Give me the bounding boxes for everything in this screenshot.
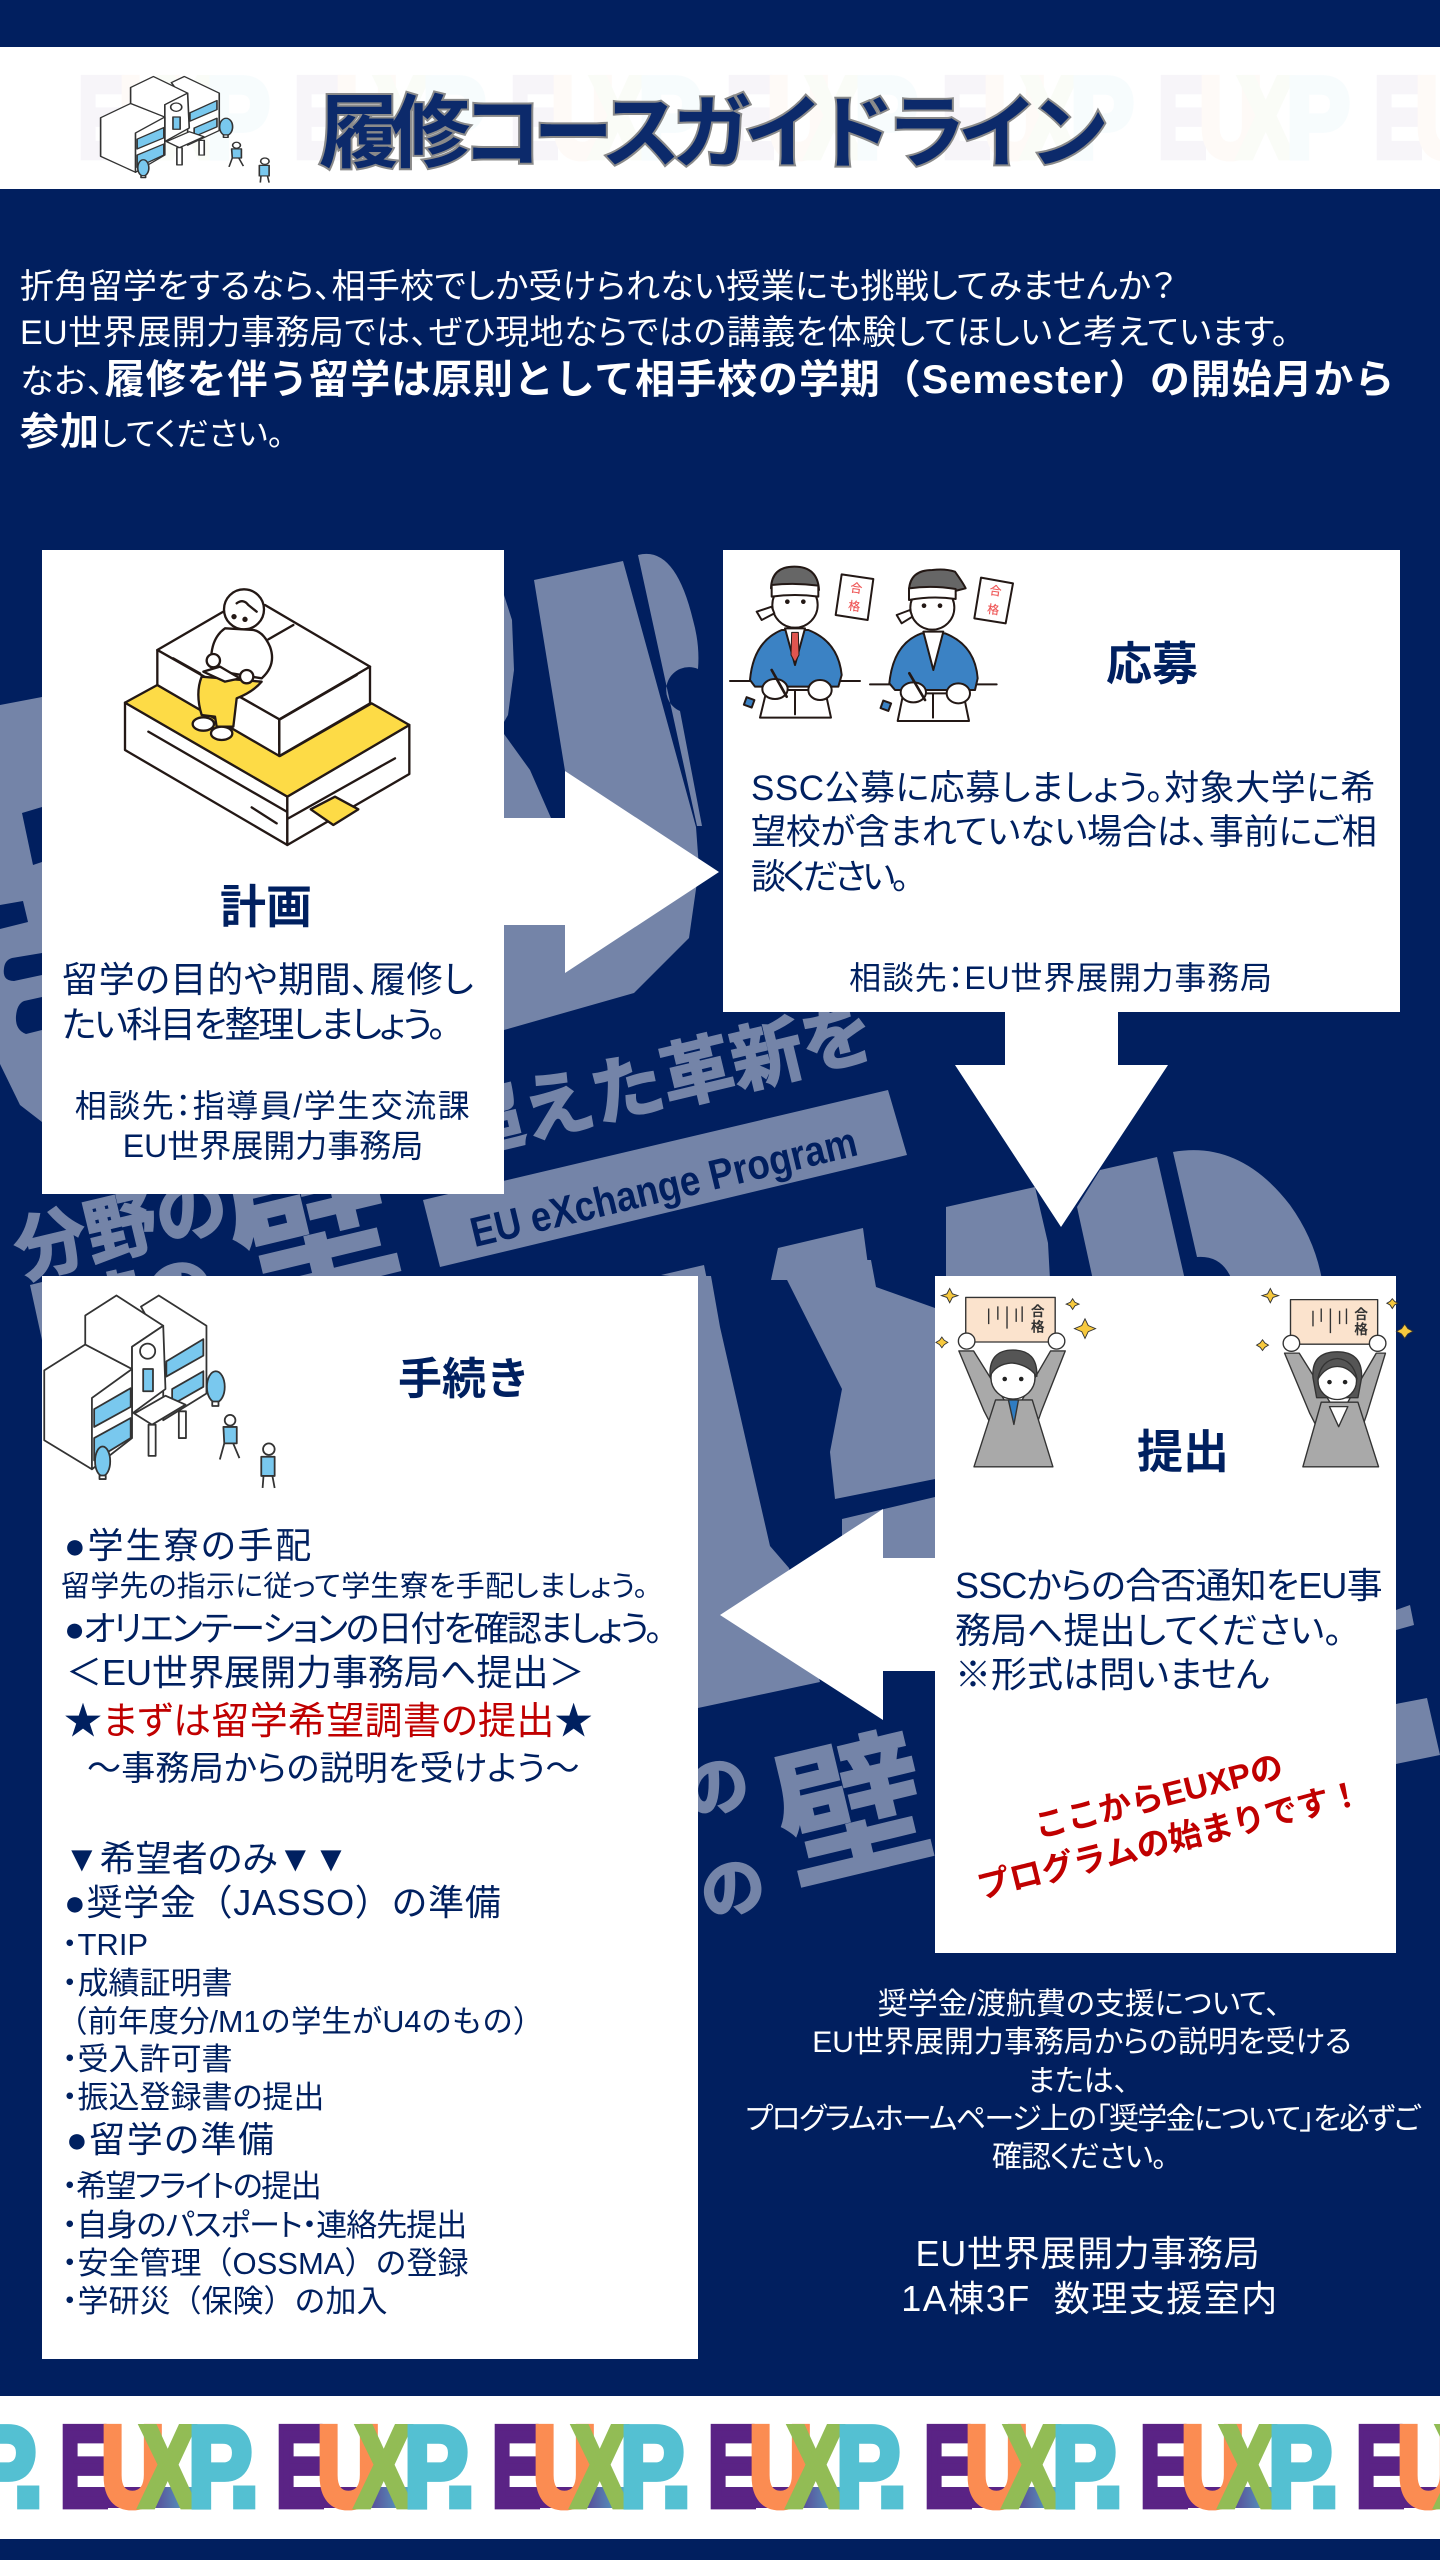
logo strip: X — [1004, 2404, 1059, 2531]
logo strip: P — [1052, 2404, 1116, 2531]
logo strip: X — [1220, 2404, 1275, 2531]
faint logo pattern: P — [1070, 55, 1134, 182]
heading: procedures: 手続き — [398, 1355, 530, 1404]
logo strip: . — [1309, 2403, 1340, 2530]
intro text: EU世界展開力事務局では、ぜひ現地ならではの講義を体験してほしいと考えています。 — [20, 314, 1289, 352]
faint logo pattern: U — [119, 54, 183, 182]
callout: program starts here: プログラムの始まりです！ — [973, 1774, 1366, 1906]
logo strip: E — [708, 2404, 757, 2531]
panel: procedures — [42, 1276, 698, 2359]
text: scholarship and preparation list: ・受入許可書 — [62, 2042, 232, 2077]
text: plan body — [62, 959, 474, 1045]
text: housing and orientation list: ●オリエンテーションの日付を確認ましょう。 — [64, 1610, 661, 1649]
text: scholarship note: または、 — [1027, 2065, 1129, 2098]
faint logo pattern: X — [158, 55, 213, 182]
logo strip: P — [1268, 2404, 1332, 2531]
text: scholarship note: 奨学金/渡航費の支援について、 — [878, 1988, 1280, 2021]
text: submit body: ※形式は問いません — [955, 1654, 1269, 1695]
logo strip: E — [276, 2404, 325, 2531]
text: housing and orientation list: ＜EU世界展開力事務局へ提出＞ — [66, 1652, 585, 1693]
logo strip: U — [1181, 2403, 1245, 2531]
text: scholarship and preparation list: ●奨学金（JASSO）の準備 — [64, 1882, 502, 1923]
text: scholarship and preparation list: ▼希望者のみ▼▼ — [64, 1838, 349, 1879]
text: scholarship note — [745, 1988, 1422, 2174]
icon: graduates holding certificates — [935, 1288, 1414, 1468]
arrow: apply to submit — [955, 1012, 1168, 1227]
arrow: submit to procedures — [720, 1509, 935, 1720]
intro text: なお、履修を伴う留学は原則として相手校の学期（Semester）の開始月から — [20, 358, 1395, 402]
text: scholarship and preparation list: ・成績証明書 — [62, 1966, 232, 2001]
logo strip: . — [1093, 2403, 1124, 2530]
text: office location: EU世界展開力事務局 — [915, 2233, 1260, 2274]
logo strip: E — [1140, 2404, 1189, 2531]
background watermark: の — [693, 1846, 773, 1932]
logo strip: E — [924, 2404, 973, 2531]
logo strip: P — [836, 2404, 900, 2531]
header band — [0, 47, 1440, 189]
logo strip: P — [404, 2404, 468, 2531]
text: plan contact: EU世界展開力事務局 — [123, 1128, 423, 1164]
faint logo pattern: E — [942, 55, 991, 182]
background watermark: 分野の — [7, 1165, 236, 1293]
logo strip: E — [60, 2404, 109, 2531]
background watermark: EU eXchange Program — [466, 1118, 862, 1256]
text: apply body: 談ください。 — [751, 858, 906, 897]
background watermark: 壁 — [760, 1712, 945, 1911]
faint logo pattern: X — [1022, 55, 1077, 182]
logo strip: X — [140, 2404, 195, 2531]
text: scholarship and preparation list — [57, 1838, 543, 2319]
background watermark: 壁 — [210, 1114, 413, 1331]
text: submit body — [955, 1565, 1382, 1695]
heading: apply: 応募 — [1106, 638, 1198, 690]
logo strip: X — [788, 2404, 843, 2531]
faint logo pattern: P — [206, 55, 270, 182]
faint logo pattern: P — [854, 55, 918, 182]
faint logo pattern: E — [1374, 55, 1423, 182]
text: scholarship and preparation list: ・安全管理（OSSMA）の登録 — [62, 2246, 468, 2281]
text: scholarship and preparation list: ・自身のパスポート・連絡先提出 — [62, 2208, 466, 2243]
text: scholarship and preparation list: ・希望フライトの提出 — [62, 2169, 320, 2204]
heading: plan: 計画 — [220, 881, 312, 933]
text: scholarship and preparation list: ・学研災（保険）の加入 — [62, 2284, 388, 2319]
logo strip: . — [229, 2403, 260, 2530]
icon: school building — [43, 1294, 276, 1488]
text: housing and orientation list — [61, 1525, 661, 1788]
text: plan body: 留学の目的や期間、履修し — [62, 959, 474, 1000]
faint logo pattern: P — [1286, 55, 1350, 182]
callout: program starts here: ここからEUXPの — [1030, 1747, 1287, 1845]
icon: graduates holding certificates: 合 — [1354, 1303, 1368, 1323]
logo strip: X — [572, 2404, 627, 2531]
faint logo pattern: E — [78, 55, 127, 182]
logo strip: U — [317, 2403, 381, 2531]
text: plan body: たい科目を整理しましょう。 — [62, 1004, 444, 1045]
icon: students writing exam: 格 — [986, 600, 1000, 618]
faint logo pattern: X — [590, 55, 645, 182]
intro text — [20, 268, 1395, 454]
faint logo pattern: P — [422, 55, 486, 182]
logo strip: P — [188, 2404, 252, 2531]
logo strip: . — [445, 2403, 476, 2530]
icon: person sitting on books — [124, 588, 411, 846]
faint logo pattern: E — [726, 55, 775, 182]
faint logo pattern: E — [1158, 55, 1207, 182]
text: submit body: SSCからの合否通知をEU事 — [955, 1565, 1382, 1606]
faint logo pattern: E — [510, 55, 559, 182]
logo strip: E — [492, 2404, 541, 2531]
icon: students writing exam — [729, 566, 1014, 722]
icon: students writing exam: 格 — [847, 597, 861, 615]
logo strip: P — [620, 2404, 684, 2531]
text: office location — [901, 2233, 1279, 2319]
icon: school building (header) — [100, 76, 270, 183]
text: scholarship and preparation list: （前年度分/M1の学生がU4のもの） — [57, 2005, 543, 2039]
intro text: 折角留学をするなら、相手校でしか受けられない授業にも挑戦してみませんか？ — [20, 268, 1176, 306]
logo strip: U — [101, 2403, 165, 2531]
faint logo pattern: U — [983, 54, 1047, 182]
text: housing and orientation list: ●学生寮の手配 — [64, 1525, 313, 1566]
faint logo pattern: E — [294, 55, 343, 182]
background watermark: 超えた革新を — [443, 992, 882, 1171]
text: apply body: SSC公募に応募しましょう。対象大学に希 — [751, 769, 1376, 808]
faint logo pattern: X — [806, 55, 861, 182]
faint logo pattern — [78, 54, 1440, 182]
text: submit body: 務局へ提出してください。 — [955, 1610, 1342, 1651]
text: apply contact: 相談先：EU世界展開力事務局 — [849, 960, 1273, 996]
panel: submit — [935, 1276, 1396, 1953]
text: red callout: ★まずは留学希望調書の提出★ — [64, 1701, 593, 1743]
icon: students writing exam: 合 — [988, 581, 1003, 600]
background watermark: 境の — [65, 1246, 224, 1357]
faint logo pattern: P — [638, 55, 702, 182]
background watermark: の — [677, 1745, 757, 1831]
text: housing and orientation list: 留学先の指示に従って学生寮を手配しましょう。 — [61, 1571, 648, 1603]
faint logo pattern: X — [1238, 55, 1293, 182]
logo strip: . — [13, 2403, 44, 2530]
heading: submit: 提出 — [1137, 1426, 1229, 1478]
text: plan contact — [75, 1088, 471, 1164]
text: scholarship and preparation list: ・TRIP — [62, 1927, 148, 1962]
text: housing and orientation list: ～事務局からの説明を受けよう～ — [87, 1750, 580, 1788]
faint logo pattern: U — [335, 54, 399, 182]
footer logo band — [0, 2396, 1440, 2539]
icon: graduates holding certificates: 格 — [1031, 1316, 1045, 1336]
text: scholarship note: 確認ください。 — [992, 2141, 1166, 2174]
logo strip: U — [533, 2403, 597, 2531]
logo strip: U — [749, 2403, 813, 2531]
text: apply body — [751, 769, 1377, 897]
text: scholarship and preparation list: ●留学の準備 — [66, 2119, 275, 2160]
text: office location: 1A棟3F 数理支援室内 — [901, 2278, 1279, 2319]
faint logo pattern: X — [374, 55, 429, 182]
logo strip — [0, 2403, 1440, 2531]
icon: students writing exam: 合 — [849, 579, 863, 597]
panel: apply — [723, 550, 1400, 1012]
title: 履修コースガイドライン — [319, 89, 1100, 178]
logo strip: E — [1356, 2404, 1405, 2531]
faint logo pattern: U — [767, 54, 831, 182]
logo strip: U — [965, 2403, 1029, 2531]
text: plan contact: 相談先：指導員/学生交流課 — [75, 1088, 471, 1124]
icon: graduates holding certificates: 格 — [1354, 1318, 1368, 1338]
text: scholarship and preparation list: ・振込登録書の提出 — [62, 2080, 324, 2115]
faint logo pattern: U — [1199, 54, 1263, 182]
intro text: 参加してください。 — [20, 411, 284, 454]
logo strip: X — [356, 2404, 411, 2531]
text: scholarship note: プログラムホームページ上の「奨学金について」を必ずご — [745, 2103, 1419, 2136]
text: apply body: 望校が含まれていない場合は、事前にご相 — [751, 813, 1377, 852]
text: scholarship note: EU世界展開力事務局からの説明を受ける — [812, 2026, 1352, 2059]
logo strip: . — [661, 2403, 692, 2530]
faint logo pattern: U — [551, 54, 615, 182]
arrow: plan to apply — [504, 771, 719, 973]
logo strip: . — [877, 2403, 908, 2530]
panel: plan — [42, 550, 504, 1194]
icon: graduates holding certificates: 合 — [1031, 1300, 1045, 1320]
